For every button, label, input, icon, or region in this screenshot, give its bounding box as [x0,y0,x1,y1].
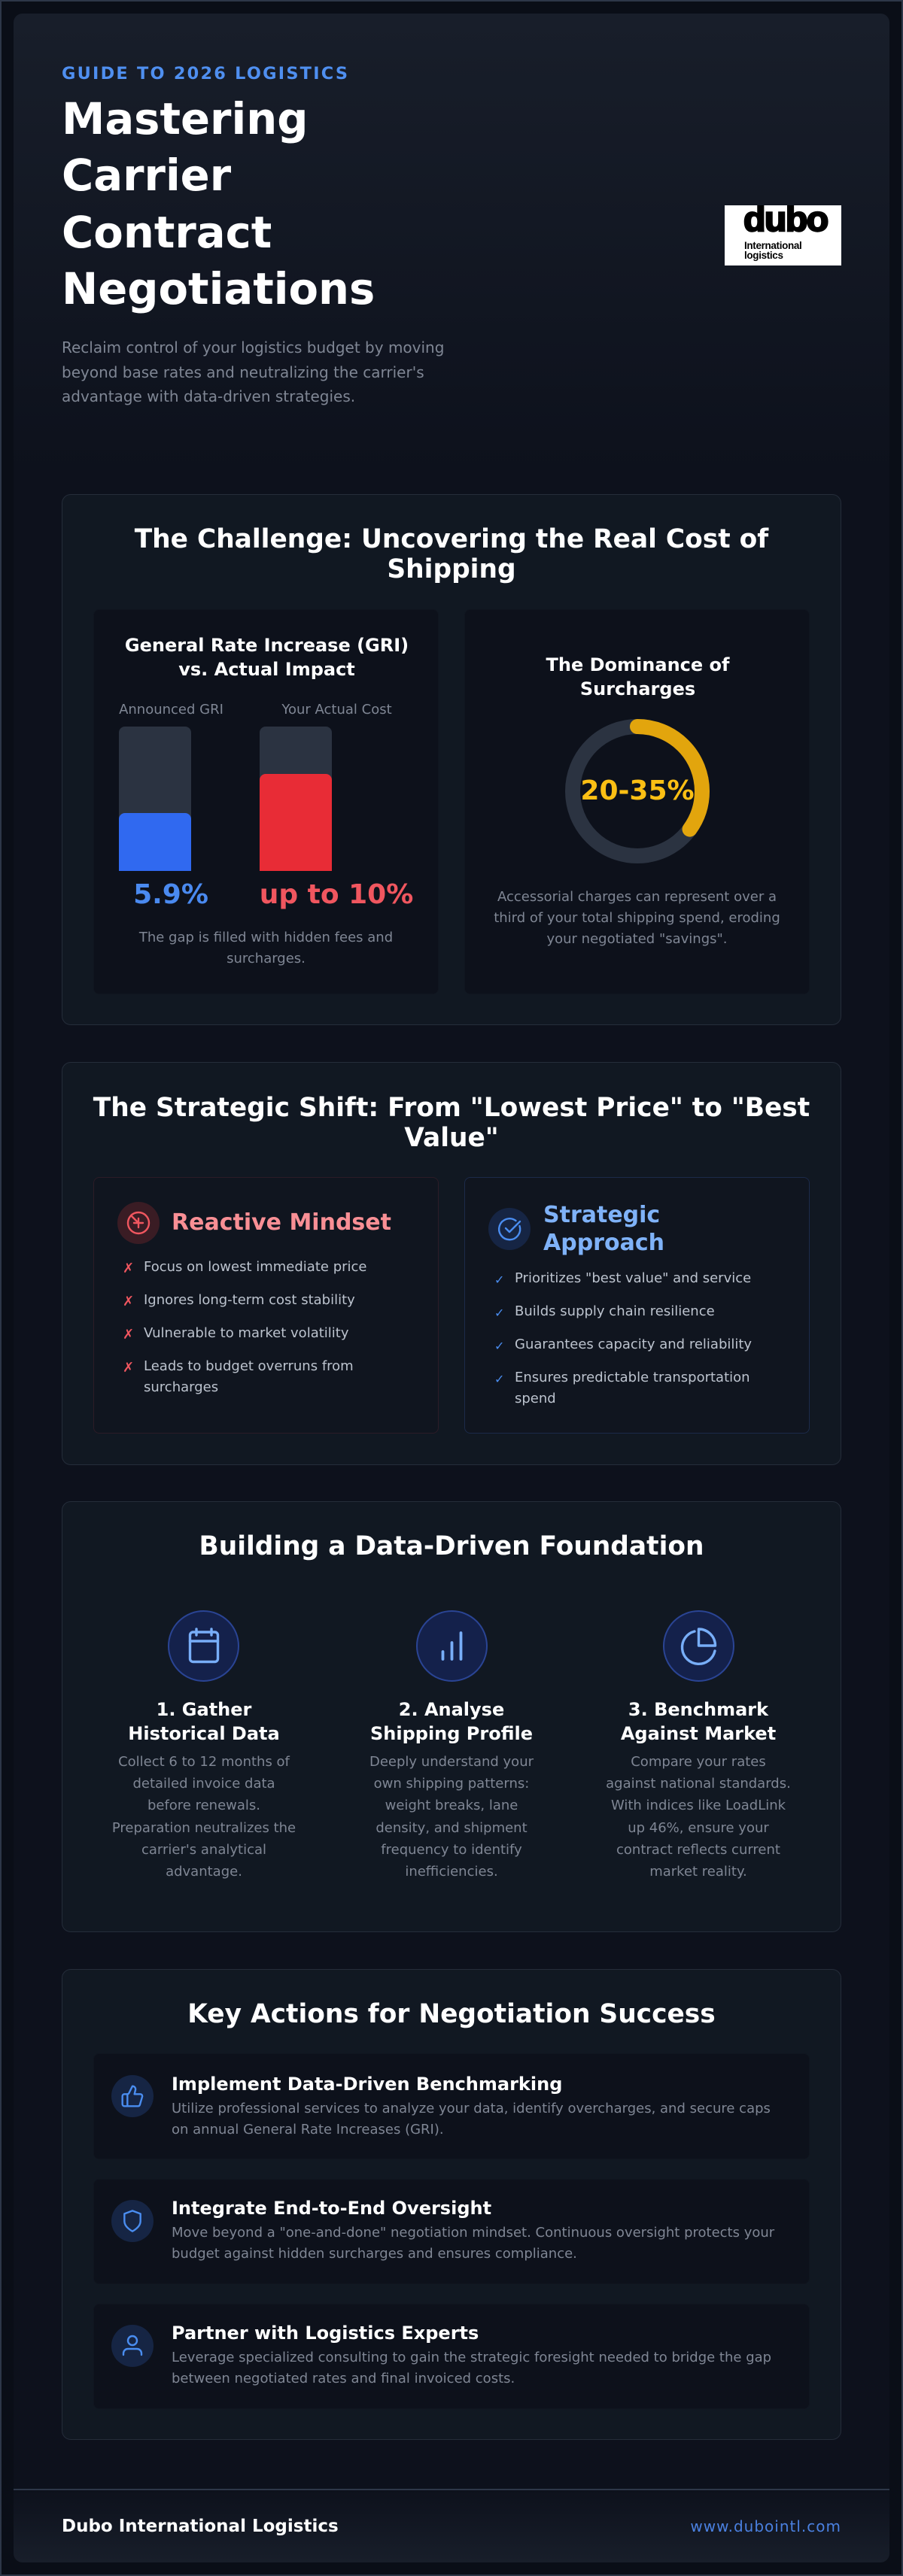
caption: gap [138,930,393,966]
step 2 text: own shipping patterns: [374,1776,529,1792]
heading: strategic shift [93,1093,810,1153]
step 2 text: Deeply understand your [369,1754,534,1770]
action 1 text [172,2101,771,2138]
action 2 heading: Integrate End-to-End Oversight [172,2198,491,2219]
item: ✓ [494,1339,504,1353]
item text: Prioritizes "best value" and service [515,1270,751,1286]
footer brand: Dubo International Logistics [62,2517,339,2536]
item: ✗ [123,1360,134,1376]
step 1 icon: calendar [168,1610,239,1682]
heading: key actions: Key Actions for Negotiation Success [187,1999,716,2029]
action 3 text [172,2350,771,2386]
item text: Vulnerable to market volatility [144,1325,349,1341]
step 2 text: inefficiencies. [405,1864,498,1880]
panel: strategic approach [464,1177,810,1434]
bar label: actual: Your Actual Cost [281,702,392,718]
reactive list [123,1259,367,1395]
step 1 heading [128,1699,280,1744]
title: Carrier [62,150,231,201]
surcharges title: Surcharges [580,678,695,699]
item text: Guarantees capacity and reliability [515,1337,752,1352]
action 3 icon: user [111,2325,154,2367]
title: Contract [62,208,272,258]
step 3 heading: Against Market [621,1723,776,1744]
panel: the strategic shift [62,1062,841,1465]
step 3 icon: pie [663,1610,734,1682]
heading: strategic shift: Value" [404,1123,499,1153]
heading: strategic shift: The Strategic Shift: From "Lowest Price" to "Best [93,1093,810,1123]
step 1 text: Collect 6 to 12 months of [118,1754,290,1770]
item: ✓ [494,1306,504,1320]
step 2 text [369,1754,534,1880]
logo tagline: logistics [744,250,783,261]
action 1 heading: Implement Data-Driven Benchmarking [172,2074,562,2095]
footer [14,2489,889,2562]
item text [515,1370,750,1406]
item: ✗ [123,1294,134,1309]
step 2 heading: Shipping Profile [370,1723,533,1744]
action 3 text: Leverage specialized consulting to gain the strategic foresight needed to bridge the gap [172,2350,771,2365]
step 3 text: With indices like LoadLink [611,1798,786,1813]
item: ✗ [123,1327,134,1343]
action 2 [93,2179,810,2284]
step 1 heading: Historical Data [128,1723,280,1744]
action 1 text: Utilize professional services to analyze your data, identify overcharges, and secure caps [172,2101,771,2116]
action 1 text: on annual General Rate Increases (GRI). [172,2122,444,2138]
donut value: 20-35% [580,775,695,806]
step 3 text: up 46%, ensure your [628,1820,769,1836]
action 2 text: Move beyond a "one-and-done" negotiation mindset. Continuous oversight protects your [172,2225,774,2241]
step 1 heading: 1. Gather [157,1699,251,1720]
value: up to 10%: up to 10% [260,879,413,910]
heading: the challenge: The Challenge: Uncovering the Real Cost of [135,524,768,554]
surcharges text: Accessorial charges can represent over a [497,889,777,905]
action 1 [93,2053,810,2159]
step 1 text: Preparation neutralizes the [112,1820,296,1836]
step 1 text: carrier's analytical [141,1842,266,1858]
surcharges text: third of your total shipping spend, eroding [494,910,780,926]
step 3 text: contract reflects current [616,1842,780,1858]
panel: reactive mindset [93,1177,439,1434]
action 3 [93,2304,810,2409]
bar label: announced: Announced GRI [119,702,223,718]
step 3 text: against national standards. [606,1776,791,1792]
heading: the challenge: Shipping [387,554,516,584]
subtitle: advantage with data-driven strategies. [62,387,355,405]
eyebrow: GUIDE TO 2026 LOGISTICS [62,64,349,83]
logo [725,205,841,265]
step 3 text: Compare your rates [631,1754,766,1770]
surcharges text: your negotiated "savings". [546,931,728,947]
item: ✓ [494,1273,504,1287]
value: 5.9%: 5.9% [133,879,208,910]
surcharges text [494,889,780,947]
step 2 text: weight breaks, lane [385,1798,518,1813]
step 2 heading [370,1699,533,1744]
strategic list [494,1270,752,1406]
item text: Ignores long-term cost stability [144,1292,355,1308]
header background [14,14,889,472]
step 2 text: frequency to identify [381,1842,522,1858]
item text: Builds supply chain resilience [515,1303,715,1319]
step 1 text: before renewals. [147,1798,260,1813]
panel: the challenge [62,494,841,1025]
action 2 icon: shield [111,2200,154,2242]
logo tagline: International [744,240,801,251]
title: Negotiations [62,264,375,314]
action 3 heading: Partner with Logistics Experts [172,2323,479,2344]
item text: Focus on lowest immediate price [144,1259,367,1275]
step 1 text [112,1754,296,1880]
donut chart [565,719,710,863]
title: Mastering [62,94,308,144]
action 2 text [172,2225,775,2262]
step 3 heading: 3. Benchmark [628,1699,768,1720]
item text [144,1358,354,1395]
step 2 heading: 2. Analyse [399,1699,504,1720]
logo tagline [744,240,801,261]
subtitle [62,338,444,405]
panel: GRI vs actual impact [93,609,439,994]
surcharges title [546,654,730,699]
item text: Ensures predictable transportation [515,1370,750,1385]
step 1 text: advantage. [166,1864,242,1880]
GRI chart title [125,635,409,680]
strategic heading: Approach [543,1229,664,1256]
panel: data-driven foundation [62,1501,841,1932]
bar fill: 5.9% [119,813,191,871]
item: ✓ [494,1372,504,1386]
item text: Leads to budget overruns from [144,1358,354,1374]
GRI chart title: General Rate Increase (GRI) [125,635,409,656]
bar fill: up to 10% [260,774,332,871]
icon: strategic [488,1208,531,1250]
footer url: www.dubointl.com [690,2517,841,2535]
strategic heading [543,1202,664,1256]
bar: announced GRI [119,727,191,871]
heading: foundation: Building a Data-Driven Foundation [199,1531,704,1561]
action 1 icon: thumbs up [111,2075,154,2117]
action 3 text: between negotiated rates and final invoiced costs. [172,2371,515,2386]
title [62,94,375,314]
action 2 text: budget against hidden surcharges and ensures compliance. [172,2246,577,2262]
item: ✗ [123,1261,134,1276]
heading: the challenge [134,524,769,584]
step 3 text: market reality. [649,1864,747,1880]
item text: surcharges [144,1379,218,1395]
reactive heading: Reactive Mindset [172,1209,391,1236]
item text: spend [515,1391,556,1406]
step 1 text: detailed invoice data [132,1776,275,1792]
subtitle: beyond base rates and neutralizing the carrier's [62,363,424,381]
panel: key actions [62,1969,841,2440]
caption: gap: surcharges. [227,951,306,966]
bar: actual cost [260,727,332,871]
GRI chart title: vs. Actual Impact [178,659,355,680]
step 3 heading [621,1699,776,1744]
strategic heading: Strategic [543,1202,660,1228]
step 2 text: density, and shipment [375,1820,528,1836]
step 2 icon: bars [415,1610,488,1682]
panel: dominance of surcharges [464,609,810,994]
icon: reactive [117,1202,160,1244]
step 3 text [606,1754,791,1880]
caption: gap: The gap is filled with hidden fees and [139,930,393,945]
subtitle: Reclaim control of your logistics budget by moving [62,338,444,357]
surcharges title: The Dominance of [546,654,729,675]
